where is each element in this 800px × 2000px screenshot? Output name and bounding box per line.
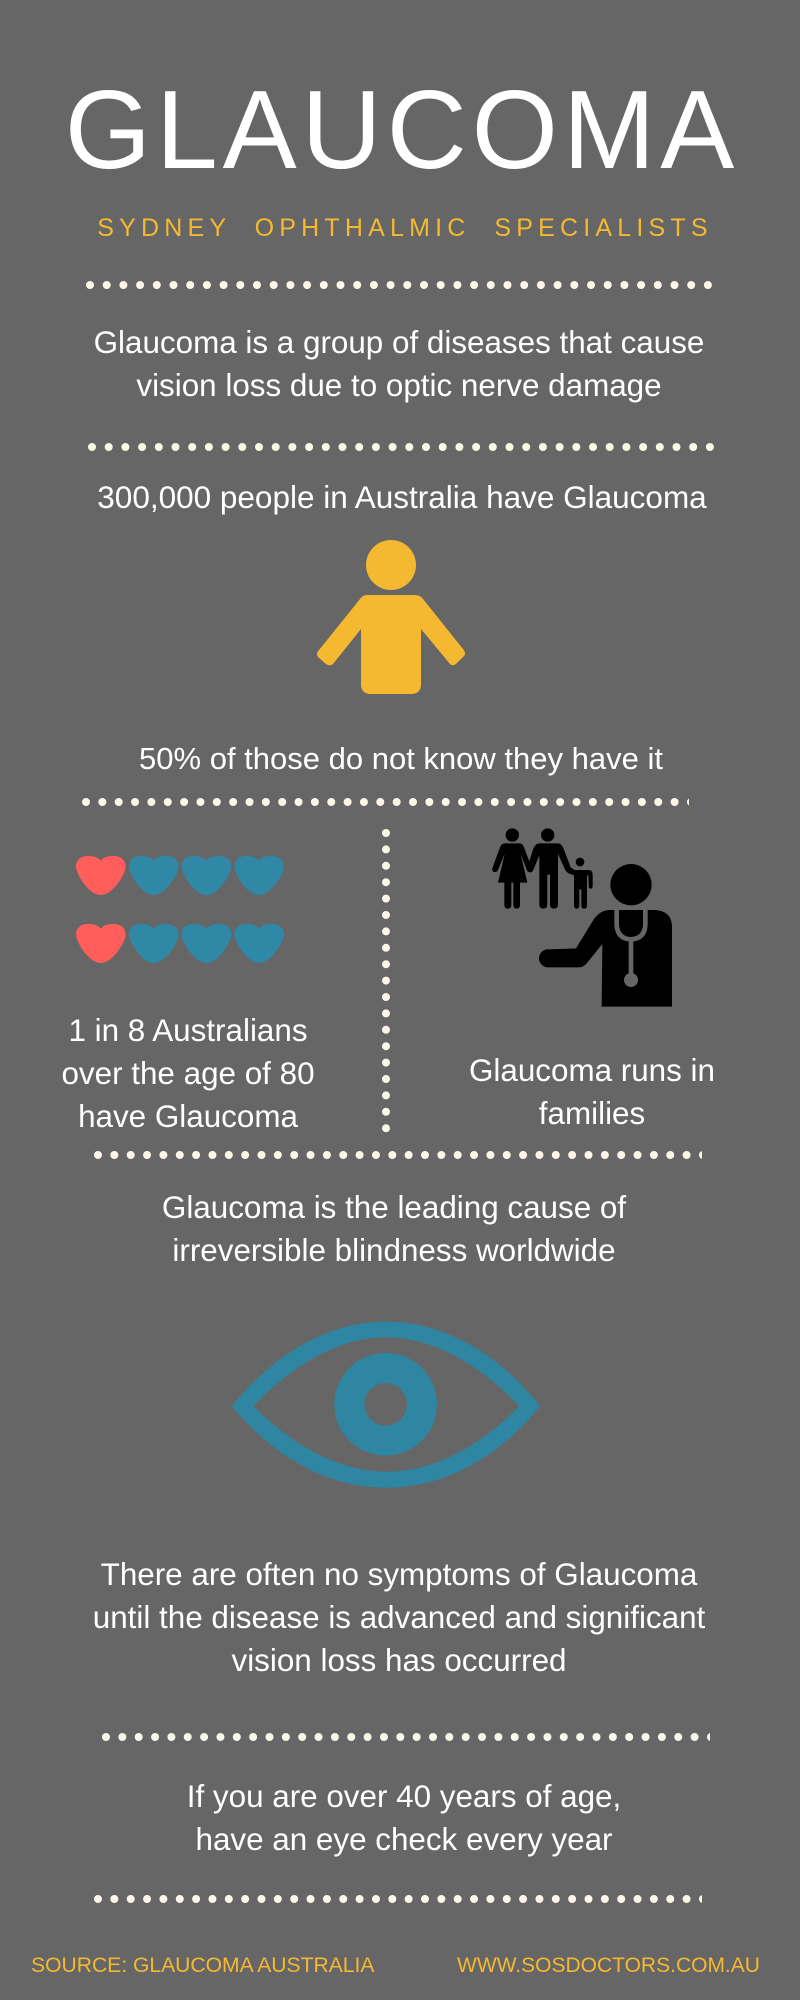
statistic: leading cause of blindness: irreversible blindness worldwide bbox=[172, 1233, 616, 1268]
call to action: eye check: have an eye check every year bbox=[195, 1822, 613, 1857]
footer website: WWW.SOSDOCTORS.COM.AU bbox=[457, 1954, 760, 1977]
call to action: eye check: If you are over 40 years of age, bbox=[187, 1779, 621, 1814]
vertical divider bbox=[382, 829, 390, 1132]
intro text bbox=[94, 325, 704, 403]
divider 3 bbox=[82, 798, 689, 806]
statistic: leading cause of blindness: Glaucoma is the leading cause of bbox=[162, 1190, 626, 1225]
divider 4 bbox=[94, 1151, 702, 1159]
statistic: runs in families: families bbox=[539, 1096, 645, 1131]
statistic: leading cause of blindness bbox=[162, 1190, 626, 1268]
subtitle: SYDNEY OPHTHALMIC SPECIALISTS bbox=[97, 214, 713, 242]
statistic: 1 in 8 Australians: over the age of 80 bbox=[61, 1056, 315, 1091]
statistic: runs in families: Glaucoma runs in bbox=[469, 1053, 715, 1088]
divider 2 bbox=[88, 443, 714, 451]
statistic: 300,000 people: 300,000 people in Australia have Glaucoma bbox=[97, 479, 707, 515]
divider 1 bbox=[86, 281, 712, 289]
footer source: SOURCE: GLAUCOMA AUSTRALIA bbox=[31, 1954, 374, 1977]
text: no symptoms bbox=[93, 1557, 705, 1678]
intro text: Glaucoma is a group of diseases that cause bbox=[94, 325, 704, 360]
title: GLAUCOMA bbox=[65, 68, 739, 192]
text: no symptoms: vision loss has occurred bbox=[232, 1643, 566, 1678]
text: no symptoms: until the disease is advanced and significant bbox=[93, 1600, 705, 1635]
statistic: runs in families bbox=[469, 1053, 715, 1131]
intro text: vision loss due to optic nerve damage bbox=[136, 368, 662, 403]
statistic: 1 in 8 Australians bbox=[61, 1013, 315, 1134]
divider 5 bbox=[102, 1733, 710, 1741]
statistic: 1 in 8 Australians: 1 in 8 Australians bbox=[68, 1013, 308, 1048]
text: no symptoms: There are often no symptoms of Glaucoma bbox=[101, 1557, 697, 1592]
statistic: 1 in 8 Australians: have Glaucoma bbox=[78, 1099, 298, 1134]
divider 6 bbox=[94, 1895, 702, 1903]
call to action: eye check bbox=[187, 1779, 621, 1857]
statistic: 50 percent unaware: 50% of those do not know they have it bbox=[139, 741, 663, 776]
